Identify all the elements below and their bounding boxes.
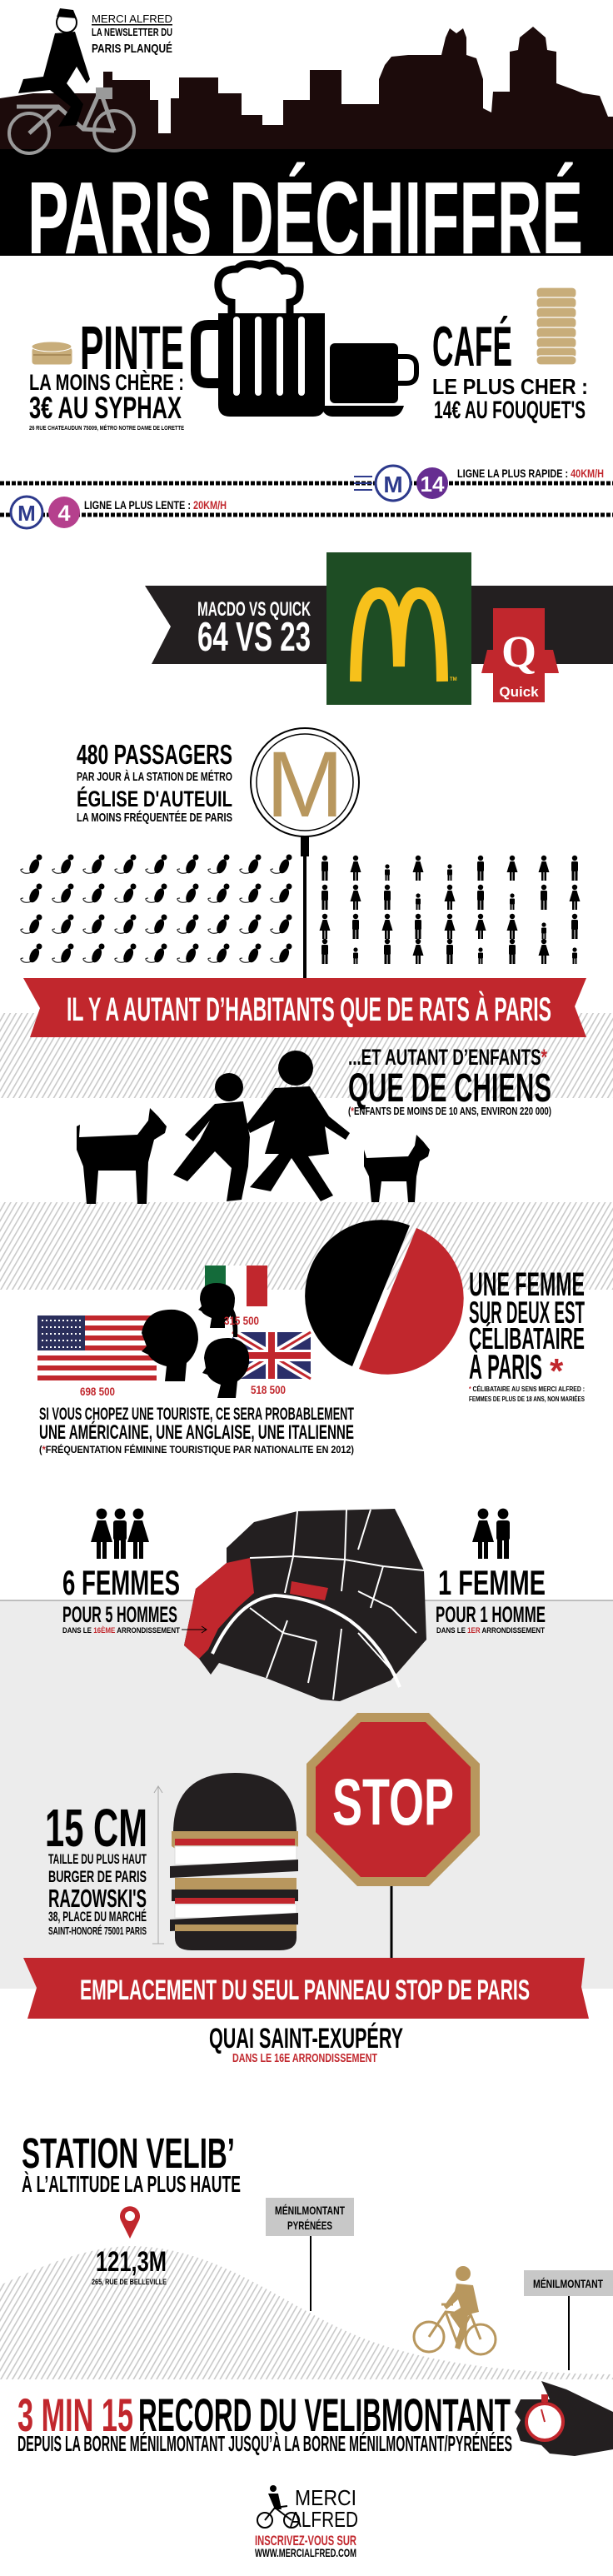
text: altitude: 265, RUE DE BELLEVILLE (92, 2278, 167, 2286)
text: café (432, 315, 588, 424)
illustration: women heads (142, 1283, 249, 1398)
flag: uk (232, 1332, 311, 1379)
text: 15 cm burger: RAZOWSKI'S (48, 1884, 147, 1913)
text: 480 passagers: 480 PASSAGERS (77, 739, 232, 770)
brand tag: Merci Alfred: LA NEWSLETTER DU (92, 26, 172, 38)
sign: ménilmontant pyrénées: PYRÉNÉES (287, 2219, 332, 2232)
sign: ménilmontant pyrénées (266, 2198, 354, 2311)
text: une femme sur deux: * (550, 1351, 564, 1390)
icon: coins right stack (536, 287, 576, 365)
text: pinte: 26 RUE CHATEAUDUN 75009, MÉTRO NOTRE DAME DE LORETTE (29, 424, 184, 432)
brand tag: Merci Alfred: PARIS PLANQUÉ (92, 42, 172, 56)
metro line 14: 14 (421, 472, 445, 497)
light gray background (0, 1600, 613, 1989)
cyclist illustration (9, 8, 134, 153)
numbers: tourist counts: 518 500 (251, 1383, 286, 1396)
text: 15 cm burger: 38, PLACE DU MARCHÉ (48, 1909, 147, 1925)
pie chart: célibataires (305, 1220, 464, 1375)
heading: station velib: À L’ALTITUDE LA PLUS HAUTE (22, 2171, 241, 2197)
text: enfants et chiens (348, 1045, 551, 1117)
metro line 4: M (17, 501, 36, 526)
text: pinte: 3€ AU SYPHAX (29, 391, 182, 425)
hill chart (0, 2246, 613, 2379)
text: touristes (39, 1405, 354, 1455)
text: 15 cm burger: BURGER DE PARIS (48, 1869, 147, 1886)
metro line 4: 4 (57, 501, 71, 526)
icon: beer mug (196, 263, 325, 417)
icon: coffee cup (321, 343, 416, 417)
metro line 14: M (383, 472, 403, 497)
stat: 6 femmes pour 5 hommes: 6 FEMMES (62, 1563, 180, 1602)
title band (0, 149, 613, 256)
numbers: tourist counts: 698 500 (80, 1385, 115, 1398)
text: quai saint-exupéry: QUAI SAINT-EXUPÉRY (209, 2023, 403, 2054)
numbers: tourist counts (80, 1314, 286, 1398)
metro line 4 (0, 497, 613, 528)
metro line 4: LIGNE LA PLUS LENTE : 20KM/H (84, 498, 227, 512)
map of paris (184, 1509, 426, 1701)
banner: rats (23, 978, 586, 1037)
text: 15 cm burger: SAINT-HONORÉ 75001 PARIS (48, 1925, 147, 1937)
footer logo: MERCI (295, 2485, 356, 2510)
people grid (320, 856, 580, 964)
text: touristes: (*FRÉQUENTATION FÉMININE TOURISTIQUE PAR NATIONALITE EN 2012) (39, 1443, 354, 1455)
text: 15 cm burger: 15 CM (45, 1798, 147, 1858)
text: pinte: LA MOINS CHÈRE : (29, 369, 184, 395)
stop sign: STOP (332, 1765, 454, 1839)
logo: quick: Q (501, 627, 536, 676)
illustration: dog right (364, 1135, 430, 1202)
icon: gold cyclist (414, 2266, 496, 2354)
stat: 1 femme pour 1 homme: 1 FEMME (438, 1563, 546, 1602)
text: record velibmontant (17, 2389, 512, 2456)
text: 15 cm burger: TAILLE DU PLUS HAUT (48, 1851, 147, 1867)
text: une femme sur deux (469, 1266, 586, 1403)
numbers: tourist counts: 315 500 (224, 1314, 259, 1327)
stat: 6 femmes pour 5 hommes (62, 1509, 207, 1635)
skyline silhouette (0, 27, 613, 149)
text: quai saint-exupéry (209, 2023, 403, 2065)
text: 480 passagers: PAR JOUR À LA STATION DE MÉTRO (77, 770, 232, 784)
metro line 14 (0, 466, 613, 501)
stat: 6 femmes pour 5 hommes: POUR 5 HOMMES (62, 1602, 177, 1627)
sign: ménilmontant pyrénées: MÉNILMONTANT (275, 2204, 345, 2217)
banner: stop (23, 1958, 589, 2019)
flag: usa (37, 1315, 157, 1380)
illustration: dog left (77, 1108, 167, 1204)
text: une femme sur deux: * CÉLIBATAIRE AU SENS MERCI ALFRED : (469, 1385, 585, 1393)
text: record velibmontant: 3 MIN 15 (17, 2389, 133, 2441)
flag: italy (205, 1266, 267, 1306)
banner: macdo vs quick (145, 586, 613, 664)
illustration: tall burger (170, 1773, 298, 1950)
footer logo (257, 2485, 358, 2532)
stop sign (306, 1713, 480, 1959)
text: café: CAFÉ (432, 315, 512, 378)
stat: 1 femme pour 1 homme: POUR 1 HOMME (436, 1602, 546, 1627)
stat: 1 femme pour 1 homme (436, 1509, 546, 1635)
footer call to action: INSCRIVEZ-VOUS SUR (255, 2533, 356, 2549)
text: 480 passagers: ÉGLISE D'AUTEUIL (77, 786, 232, 811)
brand tag: Merci Alfred: MERCI ALFRED (92, 12, 172, 25)
icon: hand with stopwatch (515, 2381, 613, 2456)
text: altitude: 121,3M (96, 2246, 167, 2278)
text: une femme sur deux: À PARIS (469, 1347, 542, 1386)
icon: metro sign pole: M (266, 732, 344, 836)
icon: coins left (32, 342, 72, 365)
banner: macdo vs quick: 64 VS 23 (197, 615, 311, 660)
logo: mcdonald's: TM (450, 677, 457, 682)
text: une femme sur deux: FEMMES DE PLUS DE 18 ANS, NON MARIÉES (469, 1395, 586, 1403)
logo: mcdonald's (326, 552, 471, 705)
metro line 14: LIGNE LA PLUS RAPIDE : 40KM/H (457, 467, 604, 480)
footer logo: ALFRED (290, 2507, 358, 2532)
text: 480 passagers (77, 739, 232, 825)
logo: quick: Quick (499, 684, 539, 700)
text: altitude (92, 2246, 167, 2286)
text: quai saint-exupéry: DANS LE 16E ARRONDISSEMENT (232, 2051, 377, 2065)
text: pinte: PINTE (80, 313, 184, 382)
heading: station velib: STATION VELIB’ (22, 2129, 235, 2177)
sign: ménilmontant (524, 2270, 613, 2370)
text: pinte (29, 313, 184, 432)
icon: map pin (120, 2206, 140, 2239)
brand tag: Merci Alfred (92, 12, 172, 56)
text: touristes: UNE AMÉRICAINE, UNE ANGLAISE, UNE ITALIENNE (39, 1420, 354, 1444)
stat: 1 femme pour 1 homme: DANS LE 1ER ARRONDISSEMENT (436, 1626, 545, 1635)
rats grid (21, 855, 292, 964)
footer call to action: WWW.MERCIALFRED.COM (255, 2546, 356, 2559)
illustration: children running (173, 1051, 350, 1201)
stat: 6 femmes pour 5 hommes: DANS LE 16ÈME ARRONDISSEMENT (62, 1626, 180, 1635)
text: touristes: SI VOUS CHOPEZ UNE TOURISTE, CE SERA PROBABLEMENT (39, 1405, 354, 1424)
striped background band 2 (0, 1202, 613, 1290)
banner: macdo vs quick: MACDO VS QUICK (197, 598, 311, 621)
heading: station velib (22, 2129, 241, 2197)
icon: metro sign pole (251, 728, 359, 980)
footer call to action (255, 2533, 356, 2559)
text: enfants et chiens: (*ENFANTS DE MOINS DE 10 ANS, ENVIRON 220 000) (348, 1105, 551, 1117)
text: café: LE PLUS CHER : (432, 374, 588, 399)
text: 480 passagers: LA MOINS FRÉQUENTÉE DE PARIS (77, 811, 232, 825)
logo: quick (481, 608, 559, 702)
text: 15 cm burger (45, 1786, 164, 1944)
striped background band 1 (0, 1013, 613, 1098)
